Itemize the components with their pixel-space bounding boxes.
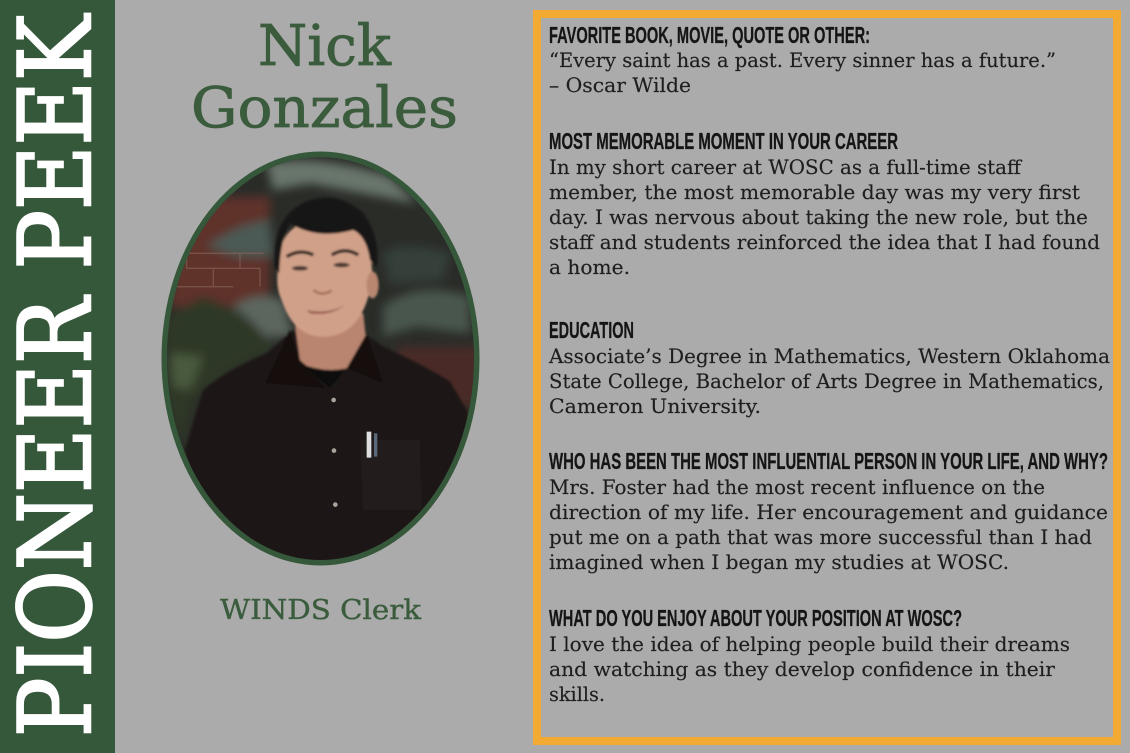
section: most memorable moment: member, the most memorable day was my very first	[549, 181, 1080, 204]
eyes	[292, 266, 308, 271]
shirt buttons	[331, 398, 336, 402]
brick lines	[173, 253, 263, 287]
neck	[294, 312, 368, 376]
brick wall	[170, 197, 270, 307]
heading: person name: Gonzales	[191, 76, 458, 141]
face	[277, 220, 373, 337]
section: most memorable moment: day. I was nervous about taking the new role, but the	[549, 206, 1088, 229]
section: most influential person: direction of my life. Her encouragement and guidance	[549, 501, 1108, 524]
sidebar: vertical green band with title	[0, 0, 115, 753]
section: enjoyment of position: skills.	[549, 683, 605, 706]
section: enjoyment of position	[549, 605, 1070, 706]
collar	[265, 330, 327, 388]
section: most influential person: Mrs. Foster had the most recent influence on the	[549, 476, 1045, 499]
portrait photo in oval frame	[162, 152, 480, 566]
panel: question and answer frame	[537, 14, 1117, 741]
heading: person name: Nick	[258, 14, 392, 79]
job title: WINDS Clerk	[220, 595, 422, 626]
nose	[313, 290, 332, 293]
eyebrows	[287, 252, 313, 257]
ear	[367, 272, 379, 298]
section: education: Associate’s Degree in Mathematics, Western Oklahoma	[548, 345, 1110, 368]
section: most influential person: put me on a path that was more successful than I had	[549, 526, 1092, 549]
mouth	[307, 305, 345, 314]
pocket	[360, 440, 422, 510]
section: most memorable moment: MOST MEMORABLE MOMENT IN YOUR CAREER	[549, 128, 898, 154]
section: favorite quote: “Every saint has a past. Every sinner has a future.”	[549, 49, 1056, 72]
section: most influential person: imagined when I began my studies at WOSC.	[549, 551, 1009, 574]
undershirt	[300, 363, 347, 388]
section: most memorable moment	[549, 128, 1100, 279]
section: favorite quote	[549, 22, 1056, 97]
section: education: EDUCATION	[549, 317, 634, 343]
section: education: Cameron University.	[549, 395, 761, 418]
section: enjoyment of position: and watching as they develop confidence in their	[549, 658, 1056, 681]
section: education	[548, 317, 1110, 418]
section: favorite quote: – Oscar Wilde	[549, 74, 691, 97]
section: most memorable moment: In my short career at WOSC as a full-time staff	[549, 156, 1023, 179]
heading: person name	[191, 14, 458, 141]
section: most influential person	[549, 448, 1108, 574]
hair	[275, 198, 377, 273]
section: most memorable moment: staff and students reinforced the idea that I had found	[549, 231, 1100, 254]
section: education: State College, Bachelor of Arts Degree in Mathematics,	[549, 370, 1104, 393]
shrub	[168, 294, 272, 432]
tree foliage	[267, 160, 417, 203]
section: favorite quote: FAVORITE BOOK, MOVIE, QUOTE OR OTHER:	[549, 22, 870, 48]
section: most memorable moment: a home.	[549, 256, 630, 279]
section: enjoyment of position: I love the idea of helping people build their dreams	[549, 633, 1070, 656]
pens in pocket	[367, 432, 371, 458]
shirt body	[185, 330, 470, 563]
